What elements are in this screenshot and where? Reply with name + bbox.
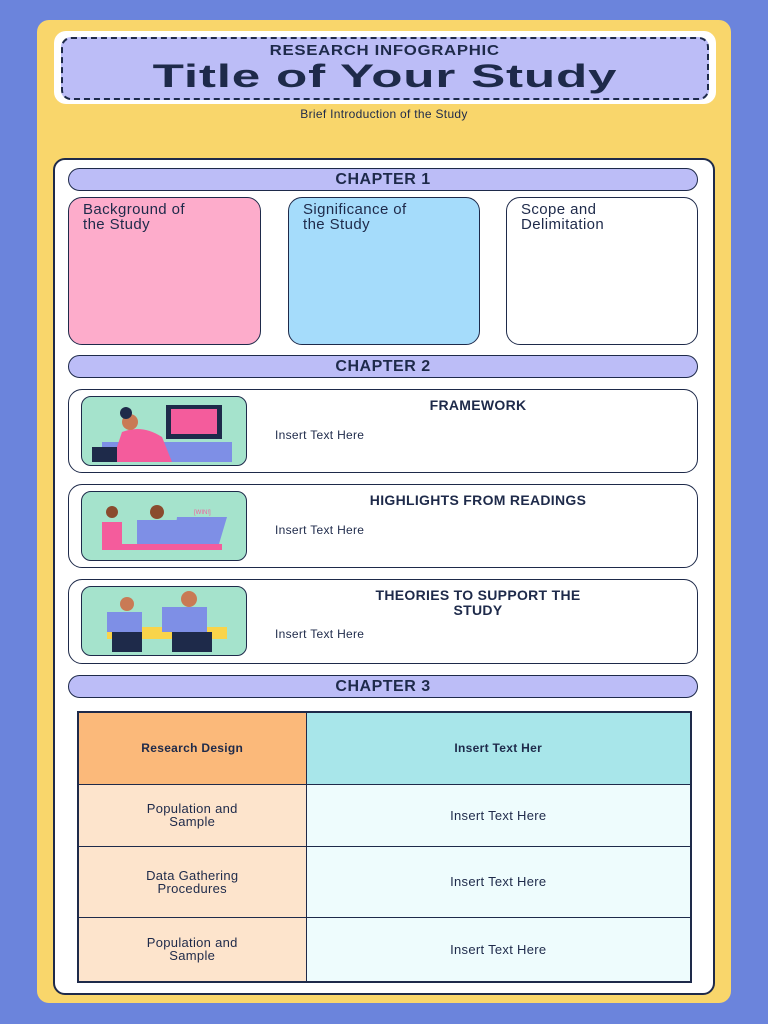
chapter 1 heading [68,168,698,191]
heading: FRAMEWORK [430,397,526,413]
box: background [68,197,261,345]
heading: STUDY [454,602,502,618]
box: scope [506,197,698,345]
methodology table: Population and [147,801,238,816]
methodology table: Sample [169,814,215,829]
chapter 2 heading [68,355,698,378]
methodology table [77,711,692,983]
chapter 1 heading: CHAPTER 1 [335,171,431,188]
heading: HIGHLIGHTS FROM READINGS [370,492,586,508]
chapter 3 heading [68,675,698,698]
intro text: Brief Introduction of the Study [300,107,468,121]
box: scope: Delimitation [521,216,604,233]
methodology table: Research Design [141,741,243,755]
main white panel [53,158,715,995]
illustration: team at computer: [WIN!] [194,510,211,516]
methodology table: Data Gathering [146,868,238,882]
box: significance: the Study [303,216,370,233]
text: Insert Text Here [275,523,364,537]
box: background: Background of [83,201,185,218]
title box [54,31,716,104]
card: highlights [68,484,698,568]
main title: Title of Your Study [153,58,617,94]
text: Insert Text Here [275,428,364,442]
methodology table: Insert Text Here [450,808,546,822]
card: theories [68,579,698,664]
methodology table: Insert Text Her [454,741,542,755]
box: significance [288,197,480,345]
box: scope: Scope and [521,201,596,218]
subtitle label: RESEARCH INFOGRAPHIC [270,42,500,59]
chapter 2 heading: CHAPTER 2 [335,358,431,375]
methodology table: Population and [147,935,238,950]
illustration: team at computer [81,491,247,561]
methodology table: Sample [169,948,215,963]
chapter 3 heading: CHAPTER 3 [335,678,431,695]
heading [376,587,580,618]
methodology table: Procedures [158,880,227,896]
heading: THEORIES TO SUPPORT THE [376,587,580,603]
box: significance: Significance of [303,201,407,218]
illustration: two people sitting [81,586,247,656]
illustration: designer [81,396,247,466]
methodology table: Insert Text Here [450,874,546,889]
card: framework [68,389,698,473]
box: background: the Study [83,216,150,233]
text: Insert Text Here [275,627,364,641]
methodology table: Insert Text Here [450,942,546,957]
